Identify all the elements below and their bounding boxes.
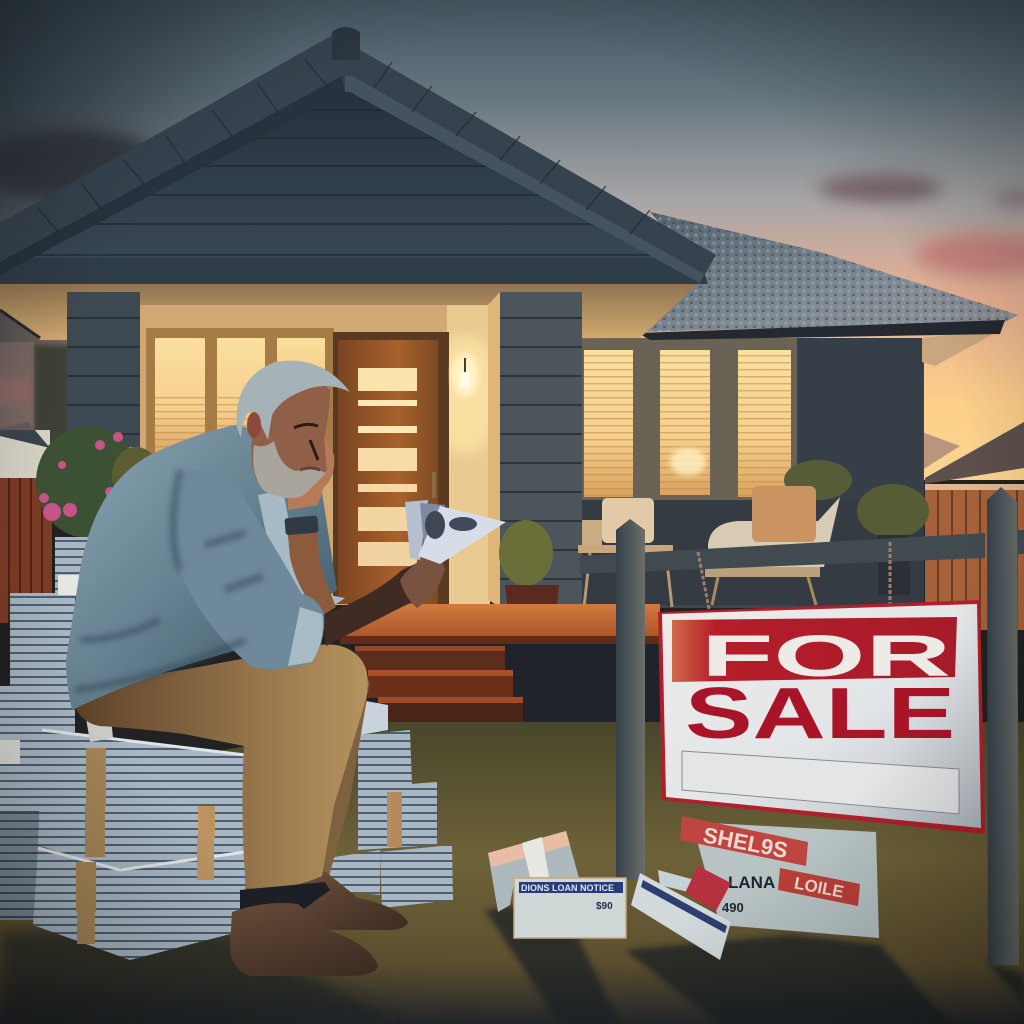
potted plant	[499, 520, 559, 627]
torso	[66, 425, 337, 710]
clouds	[0, 129, 1024, 400]
sky	[0, 0, 1024, 480]
sock	[240, 882, 330, 922]
man	[66, 361, 506, 976]
flat bill card: $90	[596, 901, 613, 912]
red tag and tilted card	[631, 866, 731, 960]
sign headline: FOR	[701, 624, 951, 689]
leaning poster	[680, 816, 879, 938]
banknotes	[405, 500, 506, 564]
paperwork on lawn	[488, 816, 879, 960]
leaning poster: SHEL9S	[701, 822, 790, 863]
main gable roof	[0, 27, 716, 284]
flowering shrub	[36, 426, 160, 538]
shirt fold shading	[75, 470, 263, 690]
leaning poster: 490	[722, 900, 744, 915]
sign board: SALE	[685, 674, 955, 754]
background trees and neighbour house	[0, 345, 1024, 524]
front shoe	[230, 903, 378, 976]
sign board	[658, 600, 985, 834]
front windows	[146, 328, 334, 463]
arm holding bills	[322, 556, 445, 646]
porch ceiling and wall	[0, 282, 700, 605]
wooden fences	[0, 478, 1024, 630]
hanging chains	[698, 542, 890, 614]
main front stacks	[33, 708, 250, 960]
flat bill card	[514, 878, 626, 938]
leaning poster: LOILE	[793, 873, 845, 902]
far-left stacks	[0, 537, 105, 920]
flat bill card: DIONS LOAN NOTICE	[521, 883, 614, 893]
lawn	[0, 722, 1024, 1024]
wall lamp	[451, 353, 479, 397]
house right wing	[582, 328, 1004, 608]
for sale sign	[580, 487, 1024, 965]
deck and steps	[340, 604, 740, 725]
head	[237, 361, 350, 498]
raised forearm and hand	[284, 433, 336, 617]
back leg and shoe	[300, 680, 408, 930]
sign posts	[580, 487, 1024, 965]
rear-right stacks	[328, 700, 453, 908]
open shirt placket	[258, 490, 345, 625]
porch chairs and furniture	[578, 460, 929, 607]
leaning poster: LANA	[728, 873, 775, 892]
small box	[488, 831, 579, 912]
right roof	[638, 212, 1018, 340]
front door	[333, 332, 449, 604]
paper stacks	[0, 537, 453, 960]
wall columns	[67, 292, 582, 607]
front leg and thigh	[72, 644, 368, 888]
sleeve	[175, 470, 324, 669]
